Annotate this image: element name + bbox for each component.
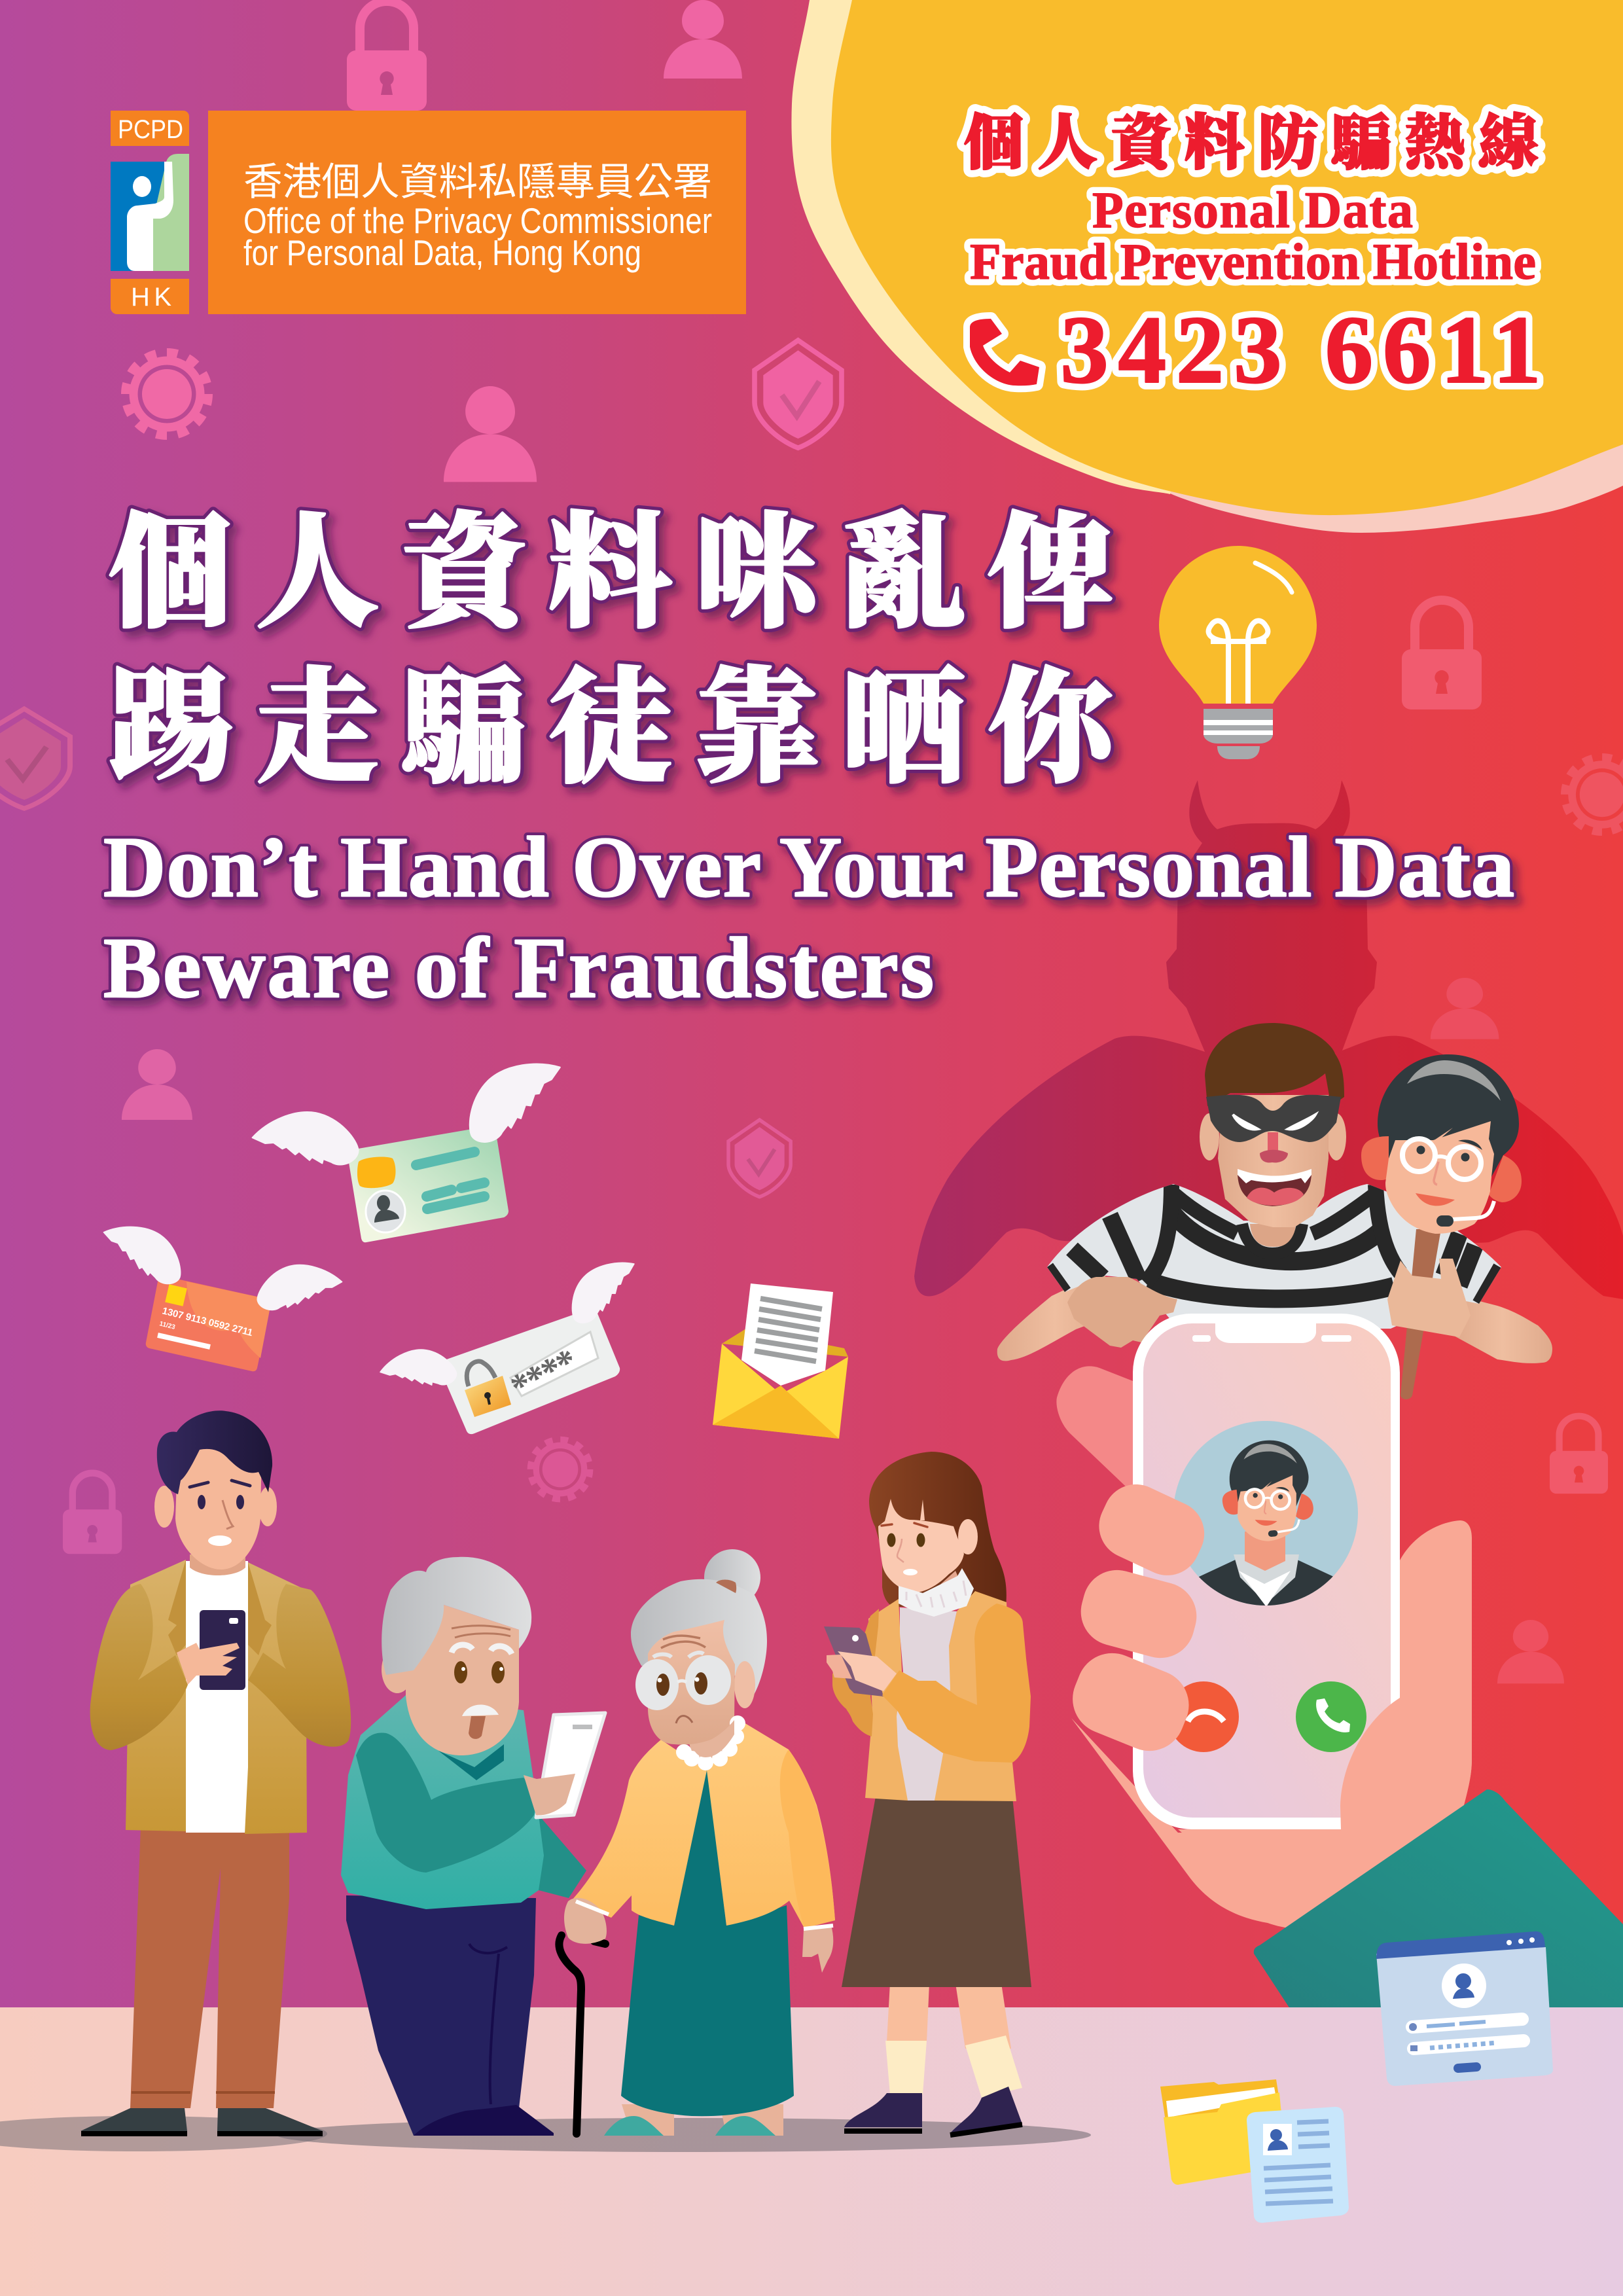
icon: flying password card: ****: [505, 1341, 584, 1408]
hotline text: Fraud Prevention Hotline: [970, 233, 1536, 290]
character: older man with phone: [341, 1557, 605, 2136]
feet shadows: [0, 2116, 1091, 2152]
main title english: Beware of Fraudsters: [103, 920, 934, 1016]
thief with operator mask: [997, 1023, 1552, 1399]
hotline text: 3423 6611: [1060, 296, 1541, 404]
folder and profile card: [1160, 2079, 1349, 2223]
main title chinese: 個人資料咪亂俾: [109, 473, 1113, 652]
phone body: [1133, 1314, 1400, 1829]
icon: flying ID card: [251, 1048, 576, 1242]
logo: organisation name: Office of the Privacy Commissioner: [243, 200, 712, 241]
main title chinese: [109, 473, 1125, 807]
logo: organisation name: [208, 111, 746, 314]
logo: PCPD mark: PCPD: [118, 115, 183, 144]
hand holding phone: [1056, 1314, 1472, 1931]
hotline text: Fraud Prevention Hotline: [970, 233, 1536, 290]
devil silhouette: [914, 780, 1623, 1299]
hotline text: 個人資料防騙熱線: [964, 95, 1539, 181]
main title english: Don’t Hand Over Your Personal Data: [103, 819, 1514, 915]
icon: flying credit card: 1307 9113 0592 2711: [161, 1305, 254, 1338]
decline button: [1168, 1681, 1239, 1752]
character: older woman with glasses: [564, 1549, 835, 2136]
main title english: [103, 819, 1514, 1016]
logo: organisation name: for Personal Data, Hong Kong: [243, 232, 641, 273]
logo: PCPD mark: H K: [131, 283, 171, 312]
teal panel: [1254, 1789, 1623, 2013]
hotline text: 3423 6611: [1060, 296, 1541, 404]
main title chinese: 踢走騙徒靠晒你: [109, 628, 1125, 807]
background icons: [0, 0, 1623, 1683]
hotline text: 個人資料防騙熱線: [964, 95, 1539, 181]
login window card: [1376, 1931, 1553, 2086]
logo: organisation name: 香港個人資料私隱專員公署: [243, 160, 712, 204]
icon: flying credit card: 11/23: [158, 1320, 176, 1331]
hotline text: Personal Data: [1092, 181, 1413, 238]
logo: PCPD mark: [111, 111, 189, 314]
main title english: Beware of Fraudsters: [103, 920, 934, 1016]
icon: envelope with letter: [713, 1283, 848, 1439]
hotline text: Personal Data: [1092, 181, 1413, 238]
answer button: [1296, 1681, 1366, 1752]
icon: flying password card: [378, 1250, 648, 1434]
main title english: Don’t Hand Over Your Personal Data: [103, 819, 1514, 915]
main title chinese: 踢走騙徒靠晒你: [109, 628, 1125, 807]
character: young woman with phone: [824, 1452, 1031, 2135]
main title chinese: 個人資料咪亂俾: [109, 473, 1113, 652]
panel: hotline badge shapes: [791, 0, 1623, 533]
call avatar: [1173, 1421, 1358, 1610]
floor: [0, 2007, 1623, 2296]
icon: flying credit card: [94, 1216, 342, 1371]
character: young man with phone: [80, 1410, 351, 2136]
icon: lightbulb: [1159, 546, 1317, 759]
hotline text: [964, 95, 1541, 404]
